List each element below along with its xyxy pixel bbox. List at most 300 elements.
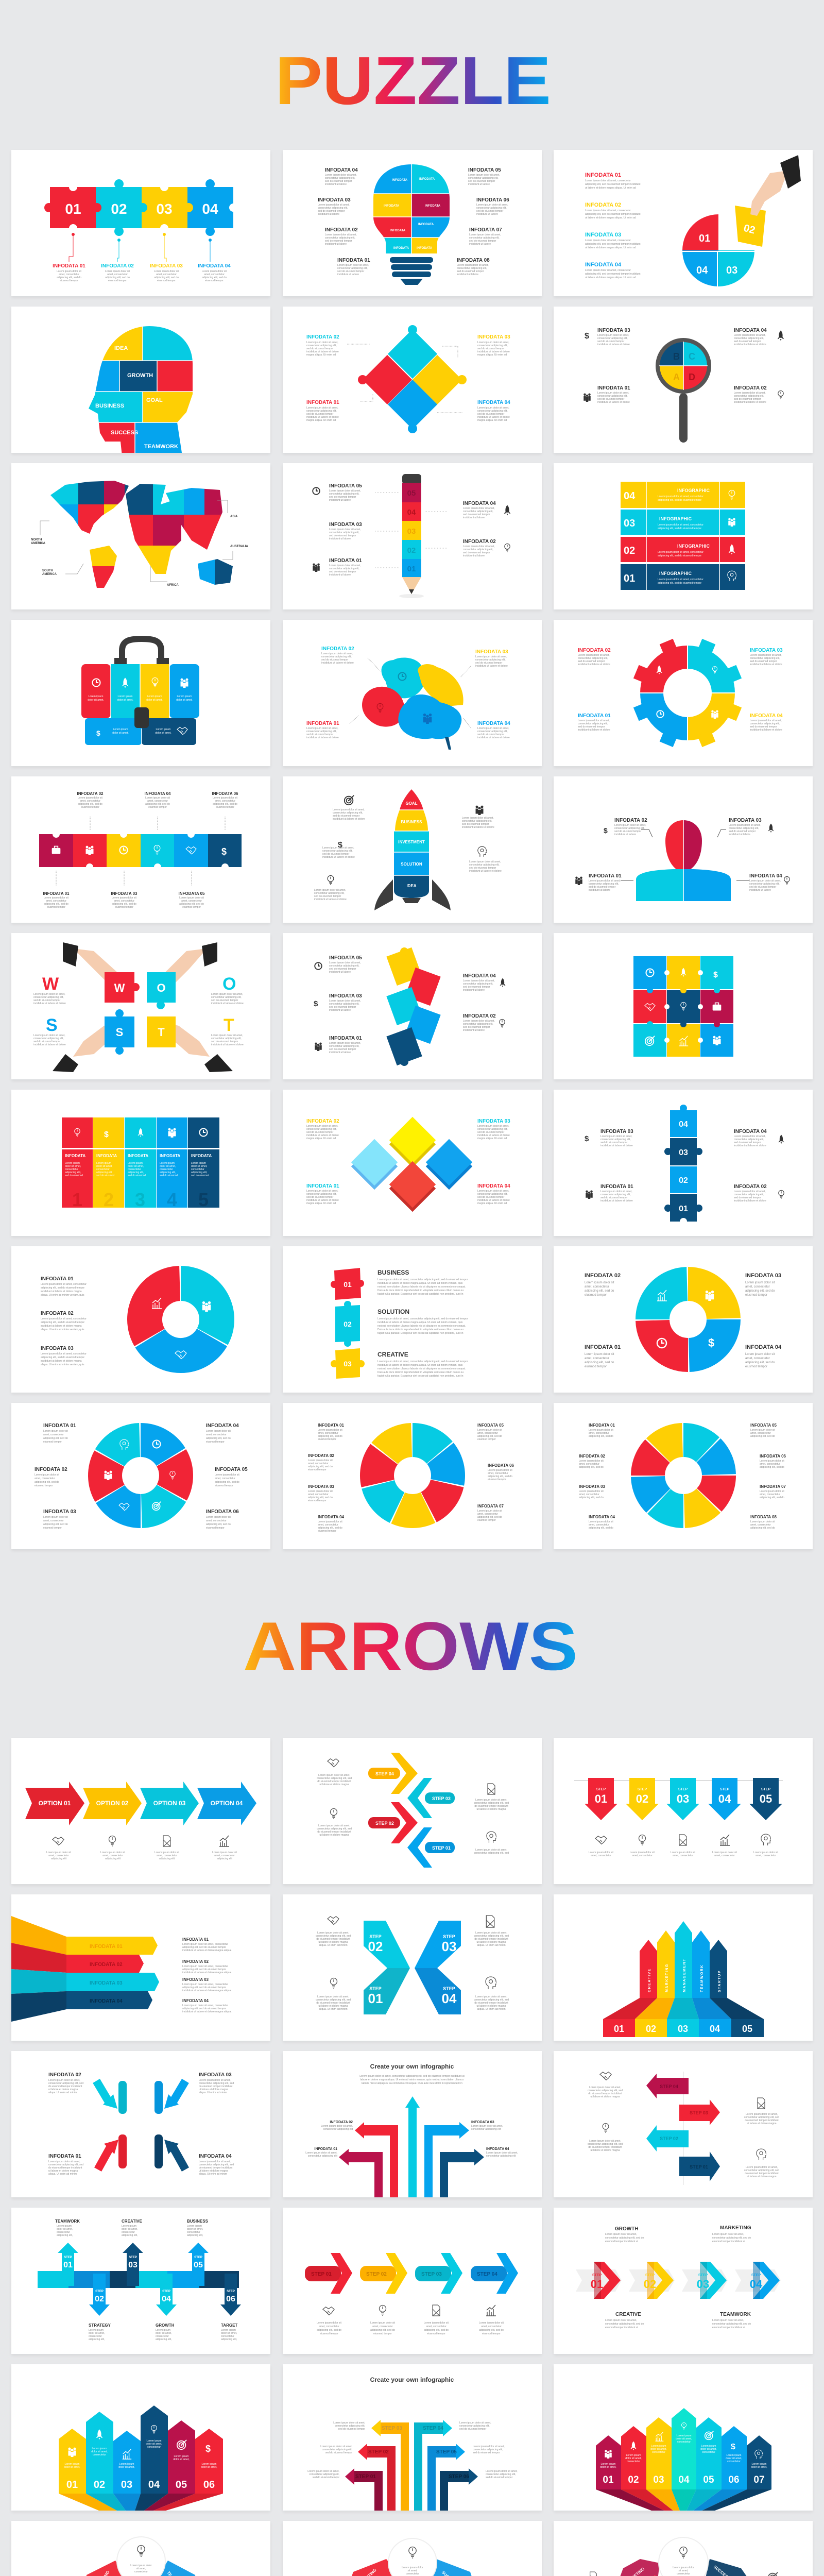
- labels: Lorem ipsum dolor sit amet,: [578, 719, 610, 722]
- arrows: STEP 01: [311, 2272, 332, 2277]
- icons and text: Lorem ipsum dolor sit: [370, 2321, 395, 2325]
- columns: 4: [167, 1189, 177, 1210]
- arrows: dolor sit amet,: [118, 2466, 135, 2469]
- magnifier: B: [673, 351, 680, 362]
- ring icons: [152, 1298, 211, 1359]
- labels: [306, 1118, 510, 1205]
- puzzle pieces: 01: [65, 201, 81, 217]
- labels: magna aliqua. Ut enim ad: [477, 419, 507, 422]
- bars: [621, 482, 745, 590]
- up and down arrows: STEP: [95, 2290, 104, 2293]
- labels: consectetur adipiscing elit, sed do: [712, 2323, 751, 2326]
- letters and text: W: [42, 974, 59, 994]
- labels: magna aliqua. Ut enim ad: [306, 1202, 336, 1205]
- labels: INFODATA 03: [329, 522, 362, 528]
- labels: Lorem ipsum dolor sit: [43, 1430, 68, 1433]
- arrows: Lorem ipsum: [651, 2445, 666, 2448]
- labels: amet, consectetur: [206, 1519, 227, 1522]
- SWOT pieces: T: [158, 1026, 165, 1039]
- labels: INFODATA 04: [734, 328, 767, 333]
- labels: [182, 1937, 232, 2013]
- labels: incididunt ut labore et dolore: [321, 662, 354, 665]
- labels: Lorem ipsum dolor sit: [477, 1429, 502, 1432]
- arrows: Lorem ipsum: [601, 2463, 615, 2466]
- labels: amet, consectetur: [750, 1523, 771, 1527]
- labels: Lorem ipsum dolor sit amet,: [305, 2151, 337, 2155]
- arrows: Lorem ipsum: [202, 2463, 216, 2466]
- labels: eiusmod tempor: [745, 1294, 767, 1297]
- panel: six arrows fan: [11, 2364, 270, 2511]
- icons and text: amet, consectetur: [426, 2325, 447, 2328]
- labels: INFODATA 02: [734, 385, 767, 391]
- icons and text: ut labore et dolore magna: [591, 2149, 620, 2152]
- labels: Lorem ipsum dolor sit: [579, 1460, 604, 1463]
- panel: tree arrows 4: [283, 2051, 542, 2197]
- bars: adipiscing elit, sed do eiusmod tempor: [658, 499, 701, 502]
- labels: sed do eiusmod tempor: [750, 660, 777, 663]
- labels: consectetur adipiscing elit,: [589, 883, 619, 886]
- labels: incididunt ut labore et dolore: [306, 416, 339, 419]
- arrows: $: [205, 2444, 211, 2454]
- arrows: 06: [728, 2475, 740, 2485]
- labels: adipiscing elit, sed do: [477, 1516, 502, 1519]
- headings and text: fugiat nulla pariatur. Excepteur sint occaecat cupidatat non proident, sunt in: [377, 1293, 464, 1296]
- labels: INFODATA 03: [111, 891, 138, 896]
- panel: ring of three: [11, 1246, 270, 1393]
- headings and text: SOLUTION: [377, 1308, 409, 1315]
- labels: Lorem ipsum dolor sit amet,: [321, 652, 353, 655]
- labels: INFODATA 02: [614, 818, 647, 823]
- head pieces: GOAL: [146, 397, 163, 403]
- labels: INFODATA 03: [43, 1509, 76, 1515]
- side texts: consectetur adipiscing elit,: [469, 863, 500, 867]
- labels: Lorem ipsum: [89, 2329, 104, 2332]
- labels: consectetur adipiscing elit,: [321, 655, 352, 658]
- labels: Lorem ipsum dolor sit amet, consectetur: [182, 1965, 228, 1968]
- text list: adipiscing elit, sed do eiusmod tempor incididunt: [585, 243, 641, 246]
- labels: adipiscing elit, sed do: [206, 1523, 231, 1526]
- labels: Lorem ipsum dolor sit: [78, 796, 102, 800]
- icons and text: Lorem ipsum dolor sit: [317, 2321, 341, 2325]
- panel: tree arrows 6: [283, 2364, 542, 2511]
- icons: [104, 1439, 175, 1511]
- labels: magna aliqua. Ut enim ad: [477, 1137, 507, 1140]
- side texts: sed do eiusmod tempor: [314, 895, 341, 898]
- headings and text: CREATIVE: [377, 1351, 408, 1358]
- labels: sed do eiusmod tempor: [306, 347, 334, 350]
- grid pieces: [633, 956, 733, 1057]
- rocket: BUSINESS: [401, 820, 422, 824]
- panel: puzzle strip 01-04: [11, 150, 270, 296]
- labels: sed do eiusmod tempor: [477, 1196, 505, 1199]
- heading: [359, 2063, 465, 2085]
- center oval: sit amet,: [408, 2569, 417, 2572]
- SWOT pieces: O: [157, 981, 166, 994]
- labels: [306, 334, 510, 422]
- side labels: INFODATA 06: [476, 197, 509, 203]
- labels: amet, consectetur: [589, 1523, 609, 1527]
- arrows: Lorem ipsum: [677, 2434, 691, 2437]
- X shape: 04: [442, 1991, 457, 2006]
- labels: aliqua. Ut enim ad minim veniam, quis: [41, 1294, 84, 1297]
- labels: sed do eiusmod tempor: [600, 1141, 628, 1144]
- icons and text: Lorem ipsum dolor sit amet,: [746, 2113, 778, 2116]
- labels: INFODATA 02: [321, 646, 354, 652]
- columns: Lorem ipsum: [191, 1162, 206, 1165]
- labels: INFODATA 01: [306, 400, 339, 405]
- labels: incididunt ut labore et dolore: [600, 1144, 633, 1147]
- arrows: Lorem ipsum: [147, 2439, 161, 2443]
- labels: dolor sit amet,: [57, 2228, 73, 2231]
- bust: [636, 820, 731, 901]
- letters and text: Lorem ipsum dolor sit amet,: [33, 1034, 65, 1037]
- labels: amet, consectetur: [46, 900, 66, 903]
- labels: Lorem ipsum dolor sit amet,: [329, 528, 361, 531]
- labels: ut labore et dolore magna: [48, 2088, 78, 2091]
- side text: consectetur adipiscing elit,: [335, 2425, 365, 2428]
- fan base: [59, 2494, 223, 2511]
- labels: aliqua. Ut enim ad minim: [48, 2091, 77, 2094]
- grid pieces: $: [713, 971, 718, 979]
- arrows: 03: [677, 1792, 689, 1805]
- labels: dolor sit amet,: [122, 2228, 138, 2231]
- arrows: dolor sit amet,: [173, 2458, 190, 2461]
- text list: Lorem ipsum dolor sit amet, consectetur: [585, 179, 631, 182]
- labels: adipiscing elit, sed do: [589, 1435, 613, 1438]
- connector lines: [69, 233, 212, 262]
- labels: sed do eiusmod tempor: [597, 340, 625, 343]
- labels: [48, 2072, 234, 2176]
- SWOT pieces: [105, 972, 176, 1055]
- letters and text: [33, 974, 244, 1046]
- labels: adipiscing elit, sed do eiusmod tempor: [182, 1968, 226, 1971]
- X shape: STEP: [443, 1986, 455, 1991]
- arrows: 02: [628, 2475, 639, 2485]
- columns: dolor sit amet,: [160, 1165, 176, 1168]
- labels: amet, consectetur: [147, 800, 168, 803]
- arrows: dolor sit amet,: [700, 2448, 717, 2451]
- labels: adipiscing elit, sed do: [750, 1435, 775, 1438]
- case body: Lorem ipsum: [89, 695, 103, 698]
- side text: sed do eiusmod tempor: [486, 2476, 513, 2479]
- labels: Lorem ipsum dolor sit: [308, 1459, 333, 1462]
- center oval: consectetur: [406, 2572, 419, 2575]
- head pieces: IDEA: [114, 345, 128, 351]
- labels: eiusmod tempor: [318, 1530, 336, 1533]
- columns: adipiscing elit,: [96, 1171, 112, 1174]
- map labels: AMERICA: [42, 573, 57, 576]
- labels: sed do eiusmod tempor: [734, 398, 761, 401]
- labels: incididunt ut labore: [463, 989, 485, 992]
- pencil: [399, 474, 424, 598]
- map labels: AMERICA: [31, 542, 46, 545]
- labels: sed do eiusmod tempor: [750, 725, 777, 728]
- side text: Lorem ipsum dolor sit amet,: [486, 2470, 518, 2473]
- headings and text: BUSINESS: [377, 1269, 409, 1276]
- labels: INFODATA 02: [35, 1467, 67, 1472]
- up and down arrows: STEP: [162, 2290, 170, 2293]
- columns: 5: [198, 1189, 209, 1210]
- labels: eiusmod tempor: [745, 1365, 767, 1368]
- arrows: dolor sit amet,: [650, 2448, 667, 2451]
- labels: incididunt ut labore: [614, 833, 636, 836]
- side texts: incididunt ut labore et dolore: [469, 870, 502, 873]
- icons and text: ut labore et dolore magna: [747, 2175, 777, 2178]
- columns: INFODATA: [128, 1154, 148, 1158]
- arrows: dolor sit amet,: [625, 2457, 642, 2460]
- puzzle pieces: 03: [156, 201, 173, 217]
- labels: consectetur adipiscing elit,: [597, 337, 628, 340]
- circle puzzle: [681, 206, 766, 288]
- labels: Lorem ipsum dolor sit amet,: [306, 341, 338, 344]
- side texts: consectetur adipiscing elit, sed: [316, 1935, 351, 1938]
- center oval: sit amet,: [136, 2567, 146, 2570]
- labels: incididunt ut labore: [463, 554, 485, 557]
- labels: Lorem ipsum dolor sit amet,: [199, 2160, 231, 2163]
- labels: Lorem ipsum dolor sit amet, consectetur: [182, 2004, 228, 2007]
- labels: consectetur adipiscing elit,: [578, 722, 608, 725]
- side texts: ut labore et dolore magna: [477, 2005, 506, 2008]
- labels: adipiscing elit, sed do: [35, 1481, 59, 1484]
- icons and text: consectetur adipiscing elit, sed: [474, 1852, 509, 1855]
- labels: incididunt ut labore et dolore: [734, 343, 766, 346]
- labels: INFODATA 02: [306, 334, 339, 340]
- labels: dolor sit amet,: [156, 2332, 171, 2335]
- labels: INFODATA 03: [597, 328, 630, 333]
- labels: consectetur adipiscing elit,: [477, 344, 508, 347]
- labels: [314, 955, 506, 1054]
- ribbons: INFODATA 02: [90, 1962, 123, 1968]
- labels: adipiscing elit,: [57, 2234, 73, 2237]
- labels: incididunt ut labore: [749, 889, 771, 892]
- side labels: INFODATA 07: [469, 227, 502, 233]
- icons and text: Lorem ipsum dolor sit: [154, 1851, 179, 1854]
- heading: Create your own infographic: [370, 2063, 454, 2070]
- labels: do eiusmod tempor incididunt: [199, 2085, 233, 2088]
- side texts: ut labore et dolore magna: [319, 2005, 348, 2008]
- up arrows: STARTUP: [718, 1970, 722, 1992]
- labels: INFODATA 01: [329, 558, 362, 564]
- labels: INFODATA 06: [212, 791, 238, 796]
- labels: amet, consectetur: [477, 1513, 498, 1516]
- side texts: sed do eiusmod tempor: [462, 823, 489, 826]
- heading: Lorem ipsum dolor sit amet, consectetur adipiscing elit, sed do eiusmod tempor incididunt ut: [359, 2075, 465, 2078]
- labels: amet, consectetur: [585, 1285, 609, 1289]
- labels: INFODATA 03: [579, 1484, 606, 1489]
- labels: [313, 483, 510, 577]
- labels: eiusmod tempor: [115, 906, 133, 909]
- side labels: consectetur adipiscing elit,: [337, 267, 368, 270]
- chain: 01: [679, 1205, 688, 1213]
- labels: CREATIVE: [615, 2312, 641, 2317]
- side labels: incididunt ut labore: [457, 273, 478, 276]
- columns: dolor sit amet,: [65, 1165, 81, 1168]
- pencil: 05: [407, 489, 416, 498]
- up arrows: MARKETING: [665, 1963, 669, 1992]
- icons and text: ut labore et dolore magna: [591, 2095, 620, 2098]
- arrows: [646, 2074, 720, 2181]
- side text: Lorem ipsum dolor sit amet,: [459, 2421, 491, 2425]
- petals: [85, 2561, 197, 2576]
- columns: 2: [104, 1189, 114, 1210]
- base fan: 03: [678, 2024, 688, 2034]
- labels: eiusmod tempor incididunt ut: [605, 2326, 639, 2329]
- labels: Lorem ipsum dolor sit amet,: [329, 1042, 361, 1045]
- labels: amet, consectetur: [80, 800, 100, 803]
- labels: Lorem ipsum dolor sit amet, consectetur: [41, 1283, 87, 1286]
- labels: consectetur adipiscing elit, sed do: [605, 2323, 644, 2326]
- labels: Lorem ipsum dolor sit amet,: [589, 879, 621, 883]
- headings and text: nostrud exercitation ullamco laboris nisi ut aliquip ex ea commodo consequat.: [377, 1367, 466, 1370]
- panel: five up arrows base: [554, 1894, 813, 2041]
- side texts: Lorem ipsum dolor sit amet,: [322, 846, 354, 850]
- columns: Lorem ipsum: [128, 1162, 143, 1165]
- labels: CREATIVE: [122, 2219, 143, 2224]
- labels: eiusmod tempor: [308, 1499, 327, 1502]
- labels: adipiscing elit, sed do: [44, 903, 68, 906]
- labels: eiusmod tempor: [308, 1468, 327, 1471]
- labels: Lorem ipsum dolor sit: [585, 1281, 614, 1284]
- labels: sed do eiusmod tempor: [321, 658, 349, 662]
- labels: sed do eiusmod tempor: [329, 570, 356, 573]
- labels: INFODATA 04: [198, 263, 231, 269]
- side labels: incididunt ut labore: [476, 213, 498, 216]
- labels: Lorem ipsum dolor sit amet,: [729, 824, 761, 827]
- labels: INFODATA 03: [475, 649, 508, 655]
- labels: INFODATA 01: [318, 1423, 345, 1428]
- hands: [53, 942, 233, 1072]
- text list: INFODATA 04: [585, 262, 622, 268]
- headings and text: Lorem ipsum dolor sit amet, consectetur adipiscing elit, sed do eiusmod tempor: [377, 1360, 468, 1363]
- chevrons: OPTION 03: [153, 1800, 186, 1807]
- arrows: Lorem ipsum: [92, 2447, 107, 2450]
- SWOT pieces: W: [114, 981, 125, 994]
- labels: adipiscing elit, sed do: [112, 903, 136, 906]
- labels: Lorem ipsum dolor sit amet, consectetur: [182, 1983, 228, 1986]
- rocket: IDEA: [406, 884, 417, 888]
- arrows: consectetur: [677, 2441, 691, 2444]
- labels: eiusmod tempor incididunt ut: [712, 2326, 746, 2329]
- columns: adipiscing elit,: [160, 1171, 176, 1174]
- labels: [579, 1423, 786, 1530]
- labels: INFODATA 05: [329, 483, 362, 489]
- bulb pieces: INFODATA: [419, 178, 435, 181]
- labels: amet, consectetur: [206, 1433, 227, 1436]
- arrows: dolor sit amet,: [64, 2466, 80, 2469]
- panel: diagonal chain puzzle: [283, 933, 542, 1079]
- labels: amet, consectetur: [215, 800, 235, 803]
- puzzle pieces: 04: [202, 201, 218, 217]
- chain: [664, 1105, 702, 1225]
- labels: consectetur adipiscing elit,: [597, 395, 628, 398]
- labels: incididunt ut labore et dolore magna aliqua.: [182, 1989, 232, 1992]
- labels: Lorem ipsum dolor sit: [154, 270, 179, 273]
- step arrows: STEP 03: [432, 1796, 451, 1801]
- bars: INFOGRAPHIC: [659, 516, 692, 521]
- labels: Lorem ipsum dolor sit amet,: [600, 1190, 632, 1193]
- panel: ring of four: [554, 1246, 813, 1393]
- labels: INFODATA 01: [43, 891, 70, 896]
- X shape: STEP: [369, 1934, 382, 1939]
- labels: consectetur: [187, 2231, 200, 2234]
- side text: Lorem ipsum dolor sit amet,: [307, 2470, 339, 2473]
- labels: adipiscing elit,: [187, 2234, 203, 2237]
- circle puzzle: 03: [726, 265, 737, 276]
- icons and text: [589, 1834, 779, 1857]
- letters and text: incididunt ut labore et dolore: [211, 1043, 244, 1046]
- labels: Lorem ipsum dolor sit amet,: [329, 961, 361, 964]
- side texts: ut labore et dolore magna: [477, 1941, 506, 1944]
- labels: incididunt ut labore et dolore: [306, 1134, 339, 1137]
- side texts: Lorem ipsum dolor sit amet,: [333, 808, 365, 811]
- ring: [633, 1425, 734, 1526]
- labels: incididunt ut labore: [329, 499, 351, 502]
- arrows: STEP: [678, 1788, 688, 1791]
- side labels: consectetur adipiscing elit,: [325, 177, 355, 180]
- text list: Lorem ipsum dolor sit amet, consectetur: [585, 239, 631, 242]
- bulb pieces: INFODATA: [392, 179, 408, 182]
- columns: consectetur: [128, 1168, 141, 1171]
- labels: Lorem ipsum dolor sit: [206, 1516, 231, 1519]
- side text: consectetur adipiscing elit,: [322, 2448, 352, 2451]
- arrows: [96, 2081, 185, 2170]
- labels: [43, 791, 238, 909]
- chevrons: [576, 2262, 781, 2299]
- labels: INFODATA 03: [182, 1977, 209, 1982]
- up and down arrows: 02: [95, 2295, 104, 2303]
- labels: ut labore et dolore magna: [48, 2170, 78, 2173]
- labels: incididunt ut labore et dolore magna: [41, 1360, 82, 1363]
- labels: Lorem ipsum dolor sit: [112, 896, 136, 900]
- labels: consectetur: [89, 2335, 102, 2338]
- labels: adipiscing elit, sed do: [308, 1496, 333, 1499]
- side labels: incididunt ut labore: [468, 183, 490, 186]
- labels: adipiscing elit, sed do: [57, 276, 81, 279]
- labels: consectetur adipiscing elit,: [306, 1193, 337, 1196]
- labels: INFODATA 03: [471, 2121, 494, 2124]
- side texts: consectetur adipiscing elit, sed: [474, 1935, 509, 1938]
- labels: INFODATA 04: [486, 2147, 509, 2151]
- letters and text: incididunt ut labore et dolore: [33, 1002, 66, 1005]
- labels: amet, consectetur: [204, 273, 225, 276]
- labels: adipiscing elit, sed do: [750, 1527, 775, 1530]
- labels: consectetur adipiscing elit,: [750, 657, 780, 660]
- arrows: dolor sit amet,: [146, 2443, 162, 2446]
- icons and text: ut labore et dolore magna: [747, 2122, 777, 2125]
- labels: Lorem ipsum dolor sit: [215, 1473, 239, 1477]
- magnifier: D: [689, 372, 695, 382]
- bulb pieces: INFODATA: [384, 205, 400, 208]
- labels: consectetur adipiscing elit,: [463, 510, 493, 513]
- labels: Lorem ipsum dolor sit: [477, 1510, 502, 1513]
- labels: consectetur adipiscing elit,: [329, 567, 359, 570]
- labels: adipiscing elit, sed do: [179, 903, 204, 906]
- side texts: [314, 795, 502, 901]
- text list: Lorem ipsum dolor sit amet, consectetur: [585, 269, 631, 272]
- side labels: Lorem ipsum dolor sit amet,: [337, 264, 369, 267]
- labels: adipiscing elit, sed do: [78, 803, 102, 806]
- labels: incididunt ut labore: [329, 1009, 351, 1012]
- labels: INFODATA 02: [48, 2072, 81, 2078]
- side texts: do eiusmod tempor incididunt: [474, 2002, 508, 2005]
- labels: INFODATA 04: [750, 713, 783, 719]
- icons and text: consectetur adipiscing elit, sed: [588, 2143, 623, 2146]
- headings and text: Duis aute irure dolor in reprehenderit in voluptate velit esse cillum dolore eu: [377, 1328, 464, 1331]
- labels: adipiscing elit, sed do: [760, 1466, 784, 1469]
- labels: Lorem ipsum dolor sit amet,: [605, 2319, 637, 2322]
- labels: Lorem ipsum dolor sit amet,: [48, 2079, 80, 2082]
- labels: incididunt ut labore et dolore: [750, 663, 782, 666]
